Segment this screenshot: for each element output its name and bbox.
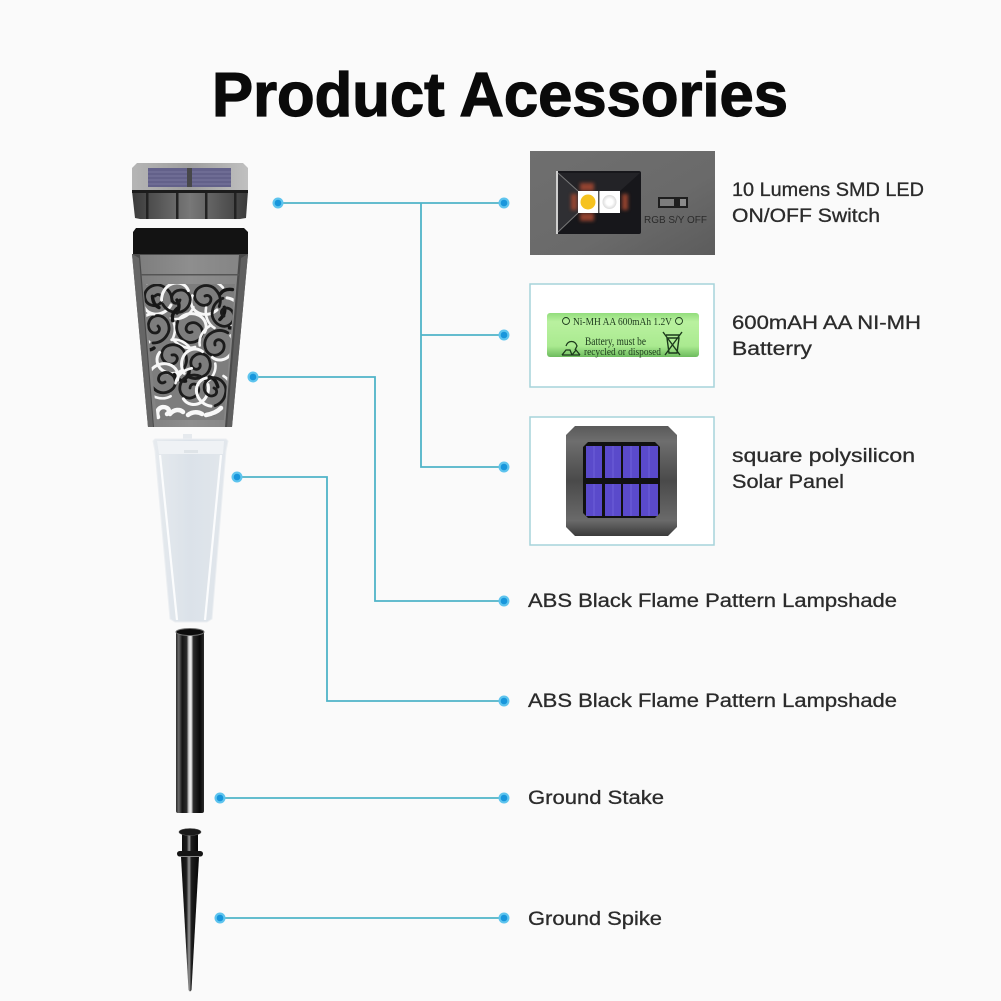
solar panel [566, 426, 677, 536]
label: LED: 10 Lumens SMD LED [732, 180, 924, 201]
label: solar panel [732, 446, 915, 493]
connector line: lampshade [248, 372, 510, 606]
switch [658, 197, 688, 208]
connector line: ground spike [214, 912, 510, 924]
dot [498, 198, 510, 208]
connector line: diffuser [232, 472, 510, 706]
product: solar lid [132, 163, 248, 219]
label: ground stake: Ground Stake [528, 788, 664, 809]
panel: battery [530, 284, 714, 387]
label: LED: ON/OFF Switch [732, 206, 880, 227]
connector line: ground stake [214, 792, 510, 804]
dot [498, 330, 510, 340]
switch labels: RGB S/Y OFF [644, 214, 707, 226]
panel: solar panel [530, 417, 714, 545]
product: ground stake tube [176, 628, 204, 813]
label: ground spike: Ground Spike [528, 909, 662, 930]
battery: Ni-MH AA 600mAh 1.2V [573, 317, 672, 328]
product: flame pattern lampshade [132, 228, 248, 427]
title: Product Acessories [212, 61, 788, 130]
battery: recycled or disposed [584, 347, 662, 358]
product: ground spike [177, 828, 203, 992]
label: lampshade: ABS Black Flame Pattern Lampshade [528, 591, 897, 612]
cut-out swirl pattern [144, 284, 235, 420]
LED recess [556, 171, 641, 234]
battery [547, 313, 699, 358]
battery: Battery, must be [585, 334, 646, 348]
product: translucent diffuser [153, 434, 228, 622]
panel: LED and switch [530, 151, 715, 255]
label: solar panel: square polysilicon [732, 446, 915, 467]
label: solar panel: Solar Panel [732, 472, 844, 493]
label: LED [732, 180, 924, 227]
label: battery: 600mAH AA NI-MH [732, 313, 921, 334]
dot [498, 462, 510, 472]
dot [272, 198, 284, 208]
label: battery: Batterry [732, 339, 813, 360]
label: diffuser: ABS Black Flame Pattern Lampshade [528, 691, 897, 712]
label: battery [732, 313, 921, 360]
connector lines: LED, battery, solar panel [272, 198, 510, 472]
